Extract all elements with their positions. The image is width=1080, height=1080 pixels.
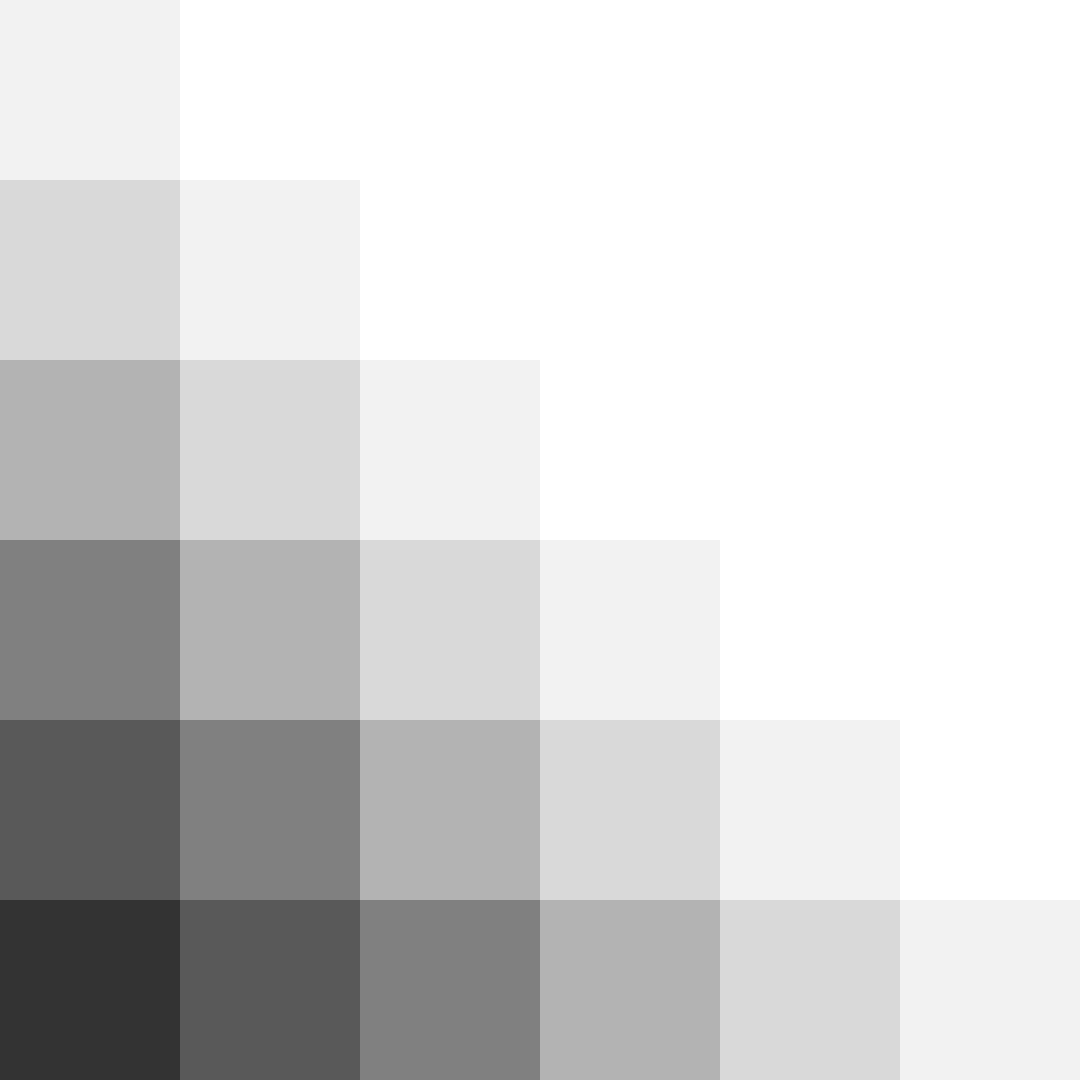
row 2 — [0, 180, 360, 360]
row 1 — [0, 0, 180, 180]
row 3 — [0, 360, 540, 540]
row 6 — [0, 900, 1080, 1080]
row 4 — [0, 540, 720, 720]
row 5 — [0, 720, 900, 900]
